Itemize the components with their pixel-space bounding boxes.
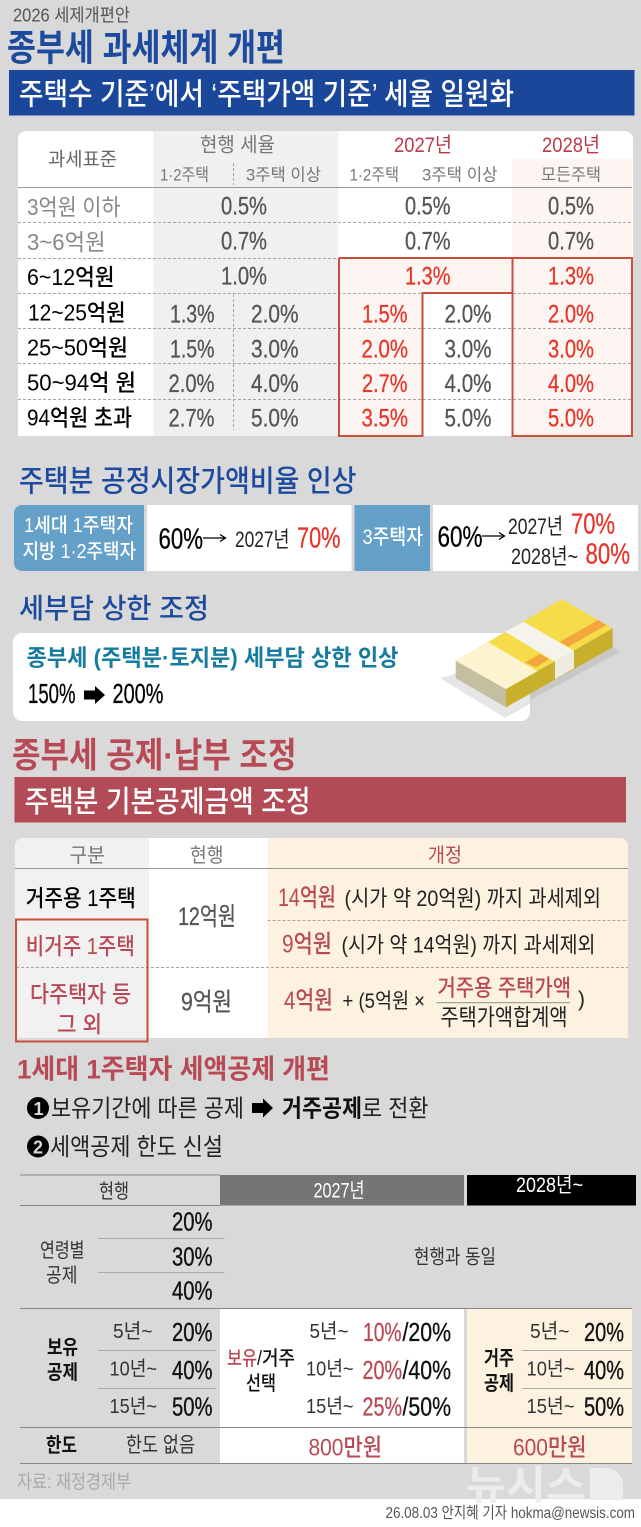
panel: credit table: 20% — [172, 1319, 212, 1347]
panel: deduction table: (시가 약 14억원) 까지 과세제외 — [342, 932, 596, 958]
arrow — [84, 686, 105, 704]
panel: credit table: /20% — [402, 1319, 451, 1347]
panel: credit table: 현행과 동일 — [414, 1246, 496, 1268]
source: 자료: 재정경제부 — [17, 1471, 131, 1493]
panel: credit table: 현행 — [99, 1180, 129, 1203]
row labels: 25~50억원 — [27, 334, 128, 360]
rate values: 2028: 5.0% — [548, 404, 594, 432]
panel: deduction table: 9억원 — [181, 988, 232, 1016]
panel: credit table: 2027년 — [314, 1180, 364, 1202]
rate values: 2027: 0.7% — [405, 228, 450, 256]
panel: fair market ratio group 2: 60% — [438, 522, 482, 554]
row labels: 12~25억원 — [28, 300, 126, 326]
subheaders: 모든주택 — [541, 166, 601, 184]
panel: credit table: 50% — [172, 1394, 212, 1422]
panel: credit table: 15년~ — [526, 1395, 575, 1418]
rate values: 2027 — [362, 192, 492, 432]
rate values: 2027: 2.0% — [362, 336, 408, 364]
panel: credit table: 5년~ — [310, 1320, 349, 1343]
panel: credit table: 공제 — [46, 1264, 78, 1287]
panel: credit table: 10년~ — [110, 1358, 157, 1380]
list item 1: 거주공제 — [282, 1096, 362, 1122]
heading: single-home credit: 1세대 1주택자 세액공제 개편 — [17, 1054, 330, 1084]
panel: credit table: 선택 — [246, 1372, 276, 1395]
panel: credit table: 15년~ — [306, 1395, 354, 1418]
panel: credit table: /50% — [402, 1394, 451, 1422]
panel: deduction table: 구분 — [70, 845, 105, 867]
panel: deduction table: 그 외 — [57, 1011, 102, 1037]
rate values: 2028: 1.3% — [548, 262, 594, 290]
panel: credit table: 5년~ — [530, 1320, 570, 1343]
panel: credit table: 한도 없음 — [126, 1434, 195, 1457]
rate values: current: 5.0% — [251, 404, 298, 432]
panel: credit table: /40% — [402, 1357, 451, 1385]
panel: fair market ratio group 1: 2027년 — [235, 527, 290, 552]
panel: credit table: 20% — [584, 1319, 624, 1347]
panel: credit table: 보유 — [227, 1348, 257, 1370]
panel: deduction table: 12억원 — [178, 903, 236, 931]
subheaders: 3주택 이상 — [422, 166, 498, 184]
row labels: 6~12억원 — [27, 264, 114, 290]
panel: burden cap: 200% — [112, 678, 164, 709]
rate values: 2028 — [548, 192, 594, 432]
rate values: current: 2.7% — [168, 404, 214, 432]
panel: credit table: 15년~ — [110, 1395, 157, 1418]
panel: deduction table — [15, 838, 628, 1042]
panel: fair market ratio group 1: 1세대 1주택자 — [24, 514, 133, 537]
panel: fair market ratio group 2 — [354, 505, 638, 571]
panel: deduction table: 다주택자 등 — [30, 981, 131, 1007]
panel: deduction table: 개정 — [428, 844, 462, 867]
rate values: current: 4.0% — [251, 370, 298, 398]
panel: fair market ratio group 1 — [14, 505, 352, 571]
rate values: 2027: 1.5% — [362, 300, 408, 328]
header: 2027: 2027년 — [394, 134, 452, 157]
panel: credit table: 거주 — [484, 1347, 514, 1370]
banner: basic deduction — [14, 777, 626, 822]
panel: credit table: 40% — [584, 1357, 624, 1385]
row labels: 94억원 초과 — [27, 404, 132, 430]
panel: credit table: 800만원 — [308, 1434, 382, 1462]
rate values: 2027: 0.5% — [405, 192, 450, 220]
subheaders: 1·2주택 — [350, 166, 399, 184]
panel: tax rate table — [18, 131, 633, 436]
rate values: current: 0.7% — [221, 228, 267, 256]
row labels: 50~94억 원 — [27, 370, 136, 396]
panel: credit table: 5년~ — [113, 1320, 153, 1343]
panel: credit table: 연령별 — [40, 1239, 84, 1262]
row labels: 3~6억원 — [27, 229, 106, 255]
list item 2: 2 — [33, 1138, 43, 1158]
rate values: current: 0.5% — [221, 192, 267, 220]
panel: credit table: 30% — [172, 1244, 212, 1272]
panel: credit table — [20, 1174, 636, 1464]
rate values: 2028: 2.0% — [548, 300, 594, 328]
panel: credit table: 50% — [584, 1394, 624, 1422]
row labels — [27, 194, 136, 430]
panel: deduction table: 거주용 주택가액 — [438, 974, 571, 1000]
banner: housing value tax rate — [9, 70, 634, 116]
panel: burden cap: 종부세 (주택분·토지분) 세부담 상한 인상 — [26, 644, 398, 670]
panel: burden cap — [13, 633, 530, 721]
rate values: 2028: 4.0% — [548, 370, 594, 398]
heading: fair market ratio: 주택분 공정시장가액비율 인상 — [19, 466, 356, 498]
heading: deduction and payment: 종부세 공제·납부 조정 — [12, 736, 296, 776]
panel: credit table: 공제 — [47, 1361, 78, 1384]
panel: credit table: 공제 — [484, 1372, 514, 1395]
rate values: current: 1.5% — [170, 336, 214, 364]
header: 2028: 2028년 — [542, 134, 600, 157]
banner: basic deduction: 주택분 기본공제금액 조정 — [24, 786, 310, 819]
panel: credit table: 10년~ — [306, 1358, 354, 1380]
rate values: 2028: 0.7% — [548, 228, 594, 256]
watermark: 뉴시스 — [466, 1464, 586, 1508]
panel: deduction table: (시가 약 20억원) 까지 과세제외 — [344, 886, 601, 911]
rate values: 2027: 4.0% — [444, 370, 492, 398]
panel: fair market ratio group 2: 2027년 — [508, 514, 563, 539]
panel: credit table: 10년~ — [526, 1358, 575, 1380]
panel: fair market ratio group 1: 70% — [297, 522, 340, 554]
icon: money bundle — [440, 599, 620, 718]
rate values: 2027: 1.3% — [405, 262, 450, 290]
list item 1: 보유기간에 따른 공제 — [51, 1096, 244, 1122]
panel: deduction table: 거주용 1주택 — [26, 885, 136, 911]
panel: deduction table: ) — [578, 988, 585, 1011]
panel: fair market ratio group 2: 3주택자 — [362, 526, 423, 549]
rate values: current: 2.0% — [168, 370, 214, 398]
panel: credit table: 20% — [172, 1208, 212, 1236]
panel: deduction table: 주택가액합계액 — [440, 1004, 568, 1030]
header: current rate: 현행 세율 — [200, 134, 275, 156]
subheaders: 3주택 이상 — [246, 166, 321, 184]
rate values: current: 1.3% — [170, 300, 214, 328]
list item 1 — [27, 1096, 428, 1122]
rate values: 2027: 3.0% — [444, 336, 492, 364]
title: 종부세 과세체계 개편 — [7, 28, 285, 68]
panel: deduction table: 4억원 — [284, 987, 333, 1015]
panel: credit table: 20% — [362, 1357, 402, 1385]
rate values: 2028: 3.0% — [548, 336, 594, 364]
panel: deduction table: 현행 — [190, 844, 224, 867]
panel: credit table: 보유 — [47, 1337, 78, 1359]
subheaders — [160, 166, 601, 184]
panel: credit table: 한도 — [46, 1434, 77, 1457]
panel: deduction table: 9억원 — [282, 930, 332, 958]
panel: fair market ratio group 1: 60% — [158, 524, 203, 556]
rate values: 2027: 2.7% — [362, 370, 408, 398]
panel: fair market ratio group 2: 2028년~ — [511, 544, 578, 569]
rate values: 2027: 5.0% — [444, 404, 492, 432]
panel: credit table: 40% — [172, 1357, 212, 1385]
rate values: 2028: 0.5% — [548, 192, 594, 220]
rate values: 2027: 3.5% — [362, 404, 408, 432]
panel: deduction table: + (5억원 × — [342, 990, 425, 1013]
heading: burden cap: 세부담 상한 조정 — [19, 593, 209, 624]
banner: housing value tax rate: 주택수 기준’에서 ‘주택가액 기준’ 세율 일원화 — [19, 78, 514, 112]
rate values: current: 1.0% — [221, 262, 267, 290]
rate values: 2027: 2.0% — [444, 300, 492, 328]
list item 2: 세액공제 한도 신설 — [50, 1134, 223, 1161]
panel: credit table: 600만원 — [513, 1434, 586, 1462]
footer strip — [0, 1499, 641, 1527]
panel: credit table: 2028년~ — [516, 1174, 583, 1197]
highlight outlines — [339, 258, 632, 436]
panel: credit table: 40% — [172, 1278, 212, 1306]
panel: deduction table: 비거주 1주택 — [26, 933, 135, 959]
panel: credit table: 25% — [362, 1394, 402, 1422]
panel: fair market ratio group 1: 지방 1·2주택자 — [22, 540, 136, 563]
panel: burden cap: 150% — [28, 678, 76, 709]
panel: deduction table: 14억원 — [278, 884, 336, 912]
rate values: current: 2.0% — [251, 300, 298, 328]
row labels: 3억원 이하 — [27, 194, 120, 220]
header: tax base: 과세표준 — [48, 148, 117, 170]
panel: fair market ratio group 2: 70% — [571, 508, 615, 540]
panel: credit table: /거주 — [257, 1347, 295, 1370]
highlight box — [16, 920, 148, 1042]
rate values: current: 3.0% — [251, 336, 298, 364]
rate values: current — [168, 192, 298, 432]
panel: credit table: 10% — [363, 1319, 402, 1347]
subheaders: 1·2주택 — [160, 166, 209, 184]
list item 1: 1 — [34, 1099, 44, 1119]
kicker: 2026 세제개편안 — [13, 6, 130, 26]
list item 1: 로 전환 — [362, 1096, 428, 1122]
